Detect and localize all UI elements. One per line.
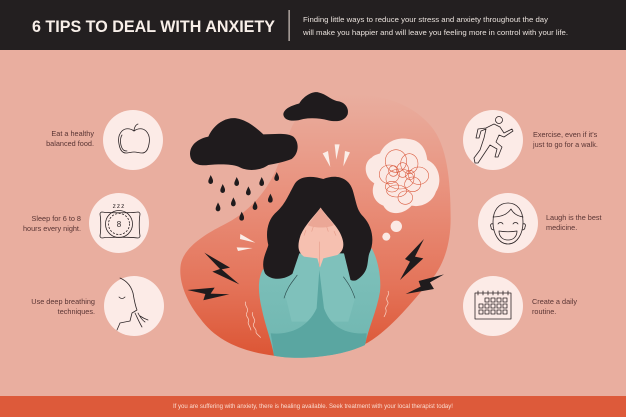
thought bubble: [366, 138, 439, 241]
header description: [302, 15, 568, 37]
squiggles: [245, 291, 389, 338]
label: [532, 130, 598, 149]
tip: sleep: [23, 193, 149, 253]
large rain cloud: [190, 118, 298, 170]
lightning bolts: [187, 239, 444, 300]
label: Laugh is the best: [546, 213, 602, 222]
small cloud: [283, 92, 348, 121]
tip: exercise: [463, 110, 598, 170]
label: Eat a healthy: [51, 129, 94, 138]
icon: calendar: [475, 291, 511, 319]
label: [546, 213, 602, 232]
shock marks above head: [237, 144, 350, 251]
label: techniques.: [58, 307, 95, 316]
finger lines: [304, 227, 336, 267]
tip: healthy food: [46, 110, 163, 170]
central illustration: [180, 92, 451, 358]
icon: alarm clock on pillow: [100, 210, 140, 238]
label: routine.: [532, 307, 556, 316]
sweater: [259, 248, 380, 358]
tip: breathing: [31, 276, 164, 336]
label: [46, 129, 94, 148]
rain drops: [208, 172, 279, 221]
label: Sleep for 6 to 8: [32, 214, 81, 223]
label: [31, 297, 95, 316]
icon: laughing face: [491, 203, 525, 244]
icon: apple: [119, 124, 149, 153]
label: [23, 214, 81, 233]
tip: sleep: 8: [117, 220, 122, 229]
title: 6 TIPS TO DEAL WITH ANXIETY: [32, 17, 276, 36]
label: hours every night.: [23, 224, 81, 233]
forearms: [285, 253, 355, 322]
sweater shading: [271, 270, 367, 358]
tangled scribble: [379, 150, 429, 204]
tip: laugh: [478, 193, 602, 253]
forehead shadow: [308, 208, 334, 227]
label: Use deep breathing: [31, 297, 95, 306]
label: Create a daily: [532, 297, 577, 306]
gradient blob: [180, 94, 451, 357]
icon: face profile breathing: [117, 278, 148, 330]
label: balanced food.: [46, 139, 94, 148]
sleeve folds: [284, 275, 355, 298]
tip: routine: [463, 276, 577, 336]
tip: sleep: zzz: [113, 203, 125, 210]
footer note: If you are suffering with anxiety, there is healing available. Seek treatment with your local therapist today!: [173, 403, 453, 410]
hair: [263, 177, 372, 281]
face and hands: [298, 208, 343, 268]
header description: will make you happier and will leave you feeling more in control with your life.: [302, 28, 568, 37]
header description: Finding little ways to reduce your stress and anxiety throughout the day: [303, 15, 548, 24]
footer bar: [0, 396, 626, 417]
header bar: [0, 0, 626, 50]
icon: runner: [474, 116, 513, 163]
label: just to go for a walk.: [532, 140, 598, 149]
label: Exercise, even if it's: [533, 130, 598, 139]
label: medicine.: [546, 223, 577, 232]
label: [532, 297, 577, 316]
